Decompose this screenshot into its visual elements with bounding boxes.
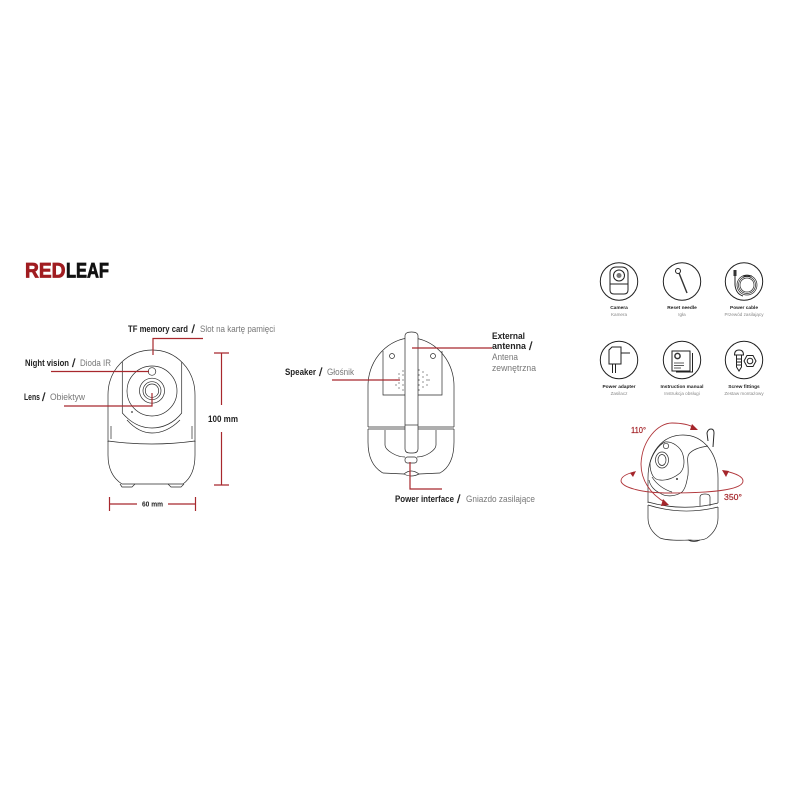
accessory: reset needle	[663, 263, 701, 317]
callout: Power interface: Power interface	[395, 494, 454, 505]
callout: Power interface: Gniazdo zasilające	[466, 494, 535, 505]
callout: TF memory card: /	[192, 322, 196, 336]
dimension: 100 mm: 100 mm	[208, 414, 238, 425]
callout: Lens: Obiektyw	[50, 392, 85, 403]
logo: Redleaf	[25, 258, 109, 282]
speaker grille	[395, 369, 430, 391]
callout: Night vision	[25, 356, 149, 372]
dimension: 60 mm: 60 mm	[142, 500, 163, 508]
accessory: power cable	[724, 263, 764, 317]
front view camera	[108, 350, 195, 487]
rotation arrow: 110 degrees: 110°	[631, 425, 646, 435]
callout: Night vision: /	[72, 356, 76, 370]
callout: Power interface: /	[457, 492, 461, 506]
callout: Speaker: Speaker	[285, 367, 316, 378]
callout: External antenna: zewnętrzna	[492, 363, 537, 374]
dimension: 60 mm	[110, 497, 196, 511]
callout: Night vision: Night vision	[25, 358, 69, 369]
rotation arrow: 110 degrees	[631, 423, 698, 506]
callout: TF memory card: TF memory card	[128, 324, 188, 335]
accessory: instruction manual	[661, 341, 703, 396]
callout: Speaker	[285, 365, 400, 380]
accessory: power adapter	[600, 341, 638, 396]
callout: External antenna: Antena	[492, 352, 519, 363]
accessory: instruction manual: Instruction manual	[661, 384, 703, 390]
dimension: 100 mm	[208, 353, 238, 485]
callout: External antenna: antenna	[492, 341, 527, 352]
callout: Speaker: /	[319, 365, 323, 379]
accessory: screw fittings: Zestaw montażowy	[724, 391, 764, 396]
rotation arrow: 350 degrees	[621, 470, 743, 502]
accessory: instruction manual: Instrukcja obsługi	[664, 391, 700, 396]
accessory: power adapter: Power adapter	[602, 384, 636, 390]
accessory: power cable: Przewód zasilający	[724, 312, 764, 317]
accessory: screw fittings: Screw fittings	[728, 384, 760, 390]
rotating camera illustration	[648, 429, 718, 542]
callout: Power interface	[395, 462, 535, 506]
callout: Speaker: Głośnik	[327, 367, 354, 378]
callout: Night vision: Dioda IR	[80, 358, 111, 369]
logo: Redleaf: RED	[25, 258, 66, 282]
callout: External antenna: External	[492, 331, 525, 342]
accessory: reset needle: Reset needle	[667, 305, 697, 311]
callout: Lens: Lens	[24, 392, 40, 403]
callout: Lens	[24, 390, 152, 406]
rotation arrow: 350 degrees: 350°	[724, 492, 742, 502]
back view camera	[368, 332, 454, 476]
callout: External antenna	[412, 331, 537, 374]
accessory: power adapter: Zasilacz	[611, 391, 628, 396]
callout: Lens: /	[42, 390, 46, 404]
callout: TF memory card	[128, 322, 275, 355]
accessory: camera: Camera	[610, 305, 628, 311]
callout: External antenna: /	[529, 339, 533, 353]
logo: Redleaf: LEAF	[66, 258, 109, 282]
accessory: camera	[600, 263, 638, 317]
accessory: camera: Kamera	[611, 312, 627, 317]
callout: TF memory card: Slot na kartę pamięci	[200, 324, 275, 335]
accessory: reset needle: Igła	[678, 312, 686, 317]
accessory: power cable: Power cable	[730, 305, 758, 311]
accessory: screw fittings	[724, 341, 764, 396]
